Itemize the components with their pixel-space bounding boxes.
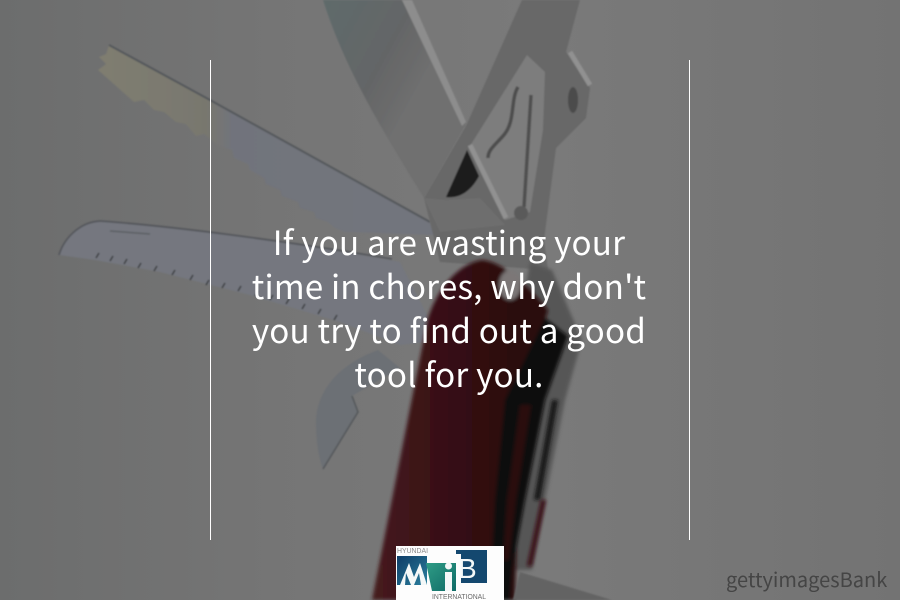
saw blade lower	[59, 221, 440, 345]
main message: you try to find out a good	[252, 304, 646, 353]
red handle	[372, 260, 568, 600]
saw blade upper	[98, 45, 436, 235]
main message: tool for you.	[354, 348, 544, 397]
right vertical rule	[689, 60, 690, 540]
logo: HYUNDAI	[397, 546, 428, 555]
main message: If you are wasting your	[273, 216, 625, 265]
large blade	[323, 0, 466, 198]
bottom steel wedge	[513, 572, 612, 600]
logo	[396, 546, 504, 600]
hook blade	[316, 350, 400, 469]
central tool frame	[424, 0, 590, 270]
handle side plates	[505, 262, 582, 570]
image credit: gettyimagesBank	[726, 564, 887, 593]
main message	[252, 216, 646, 397]
left vertical rule	[210, 60, 211, 540]
logo: B	[458, 553, 477, 584]
main message: time in chores, why don't	[252, 260, 646, 309]
